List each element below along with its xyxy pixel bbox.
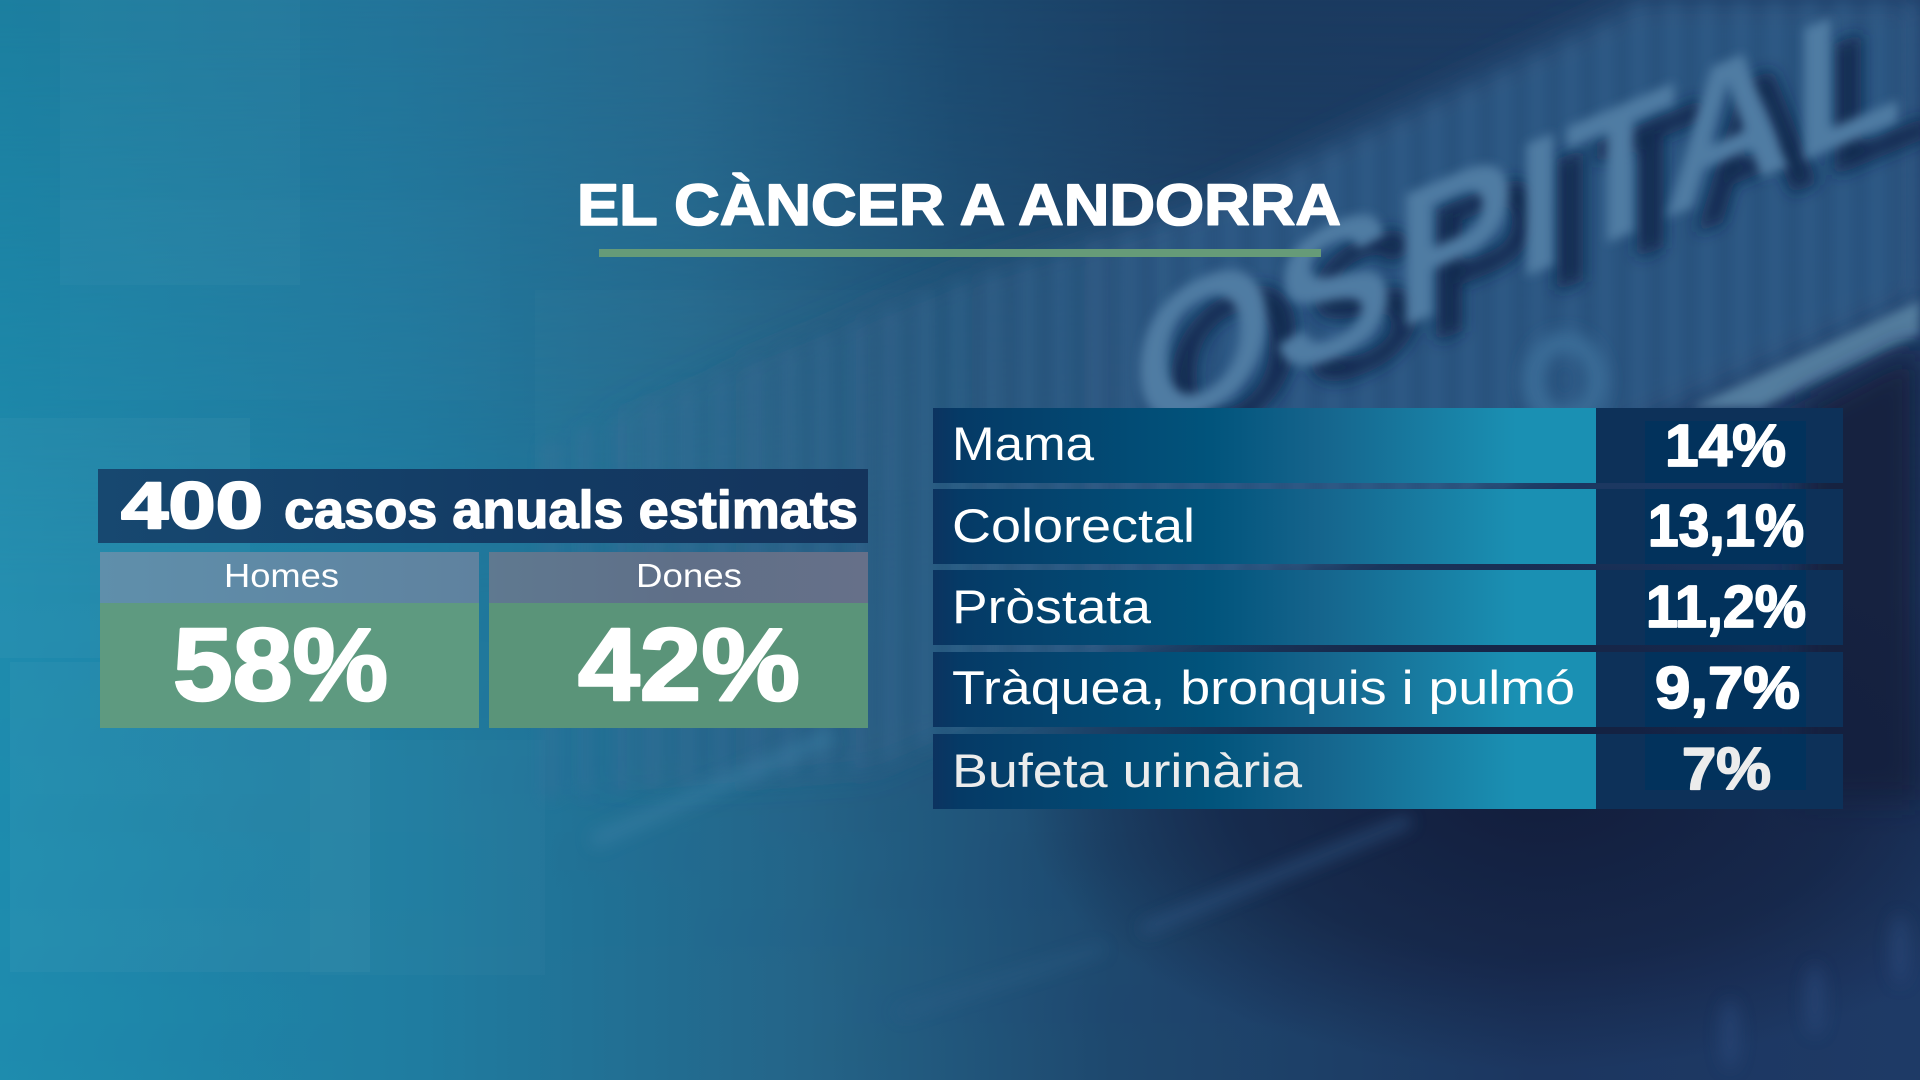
headline number: 400 bbox=[121, 468, 263, 542]
row: Colorectal: 13,1% bbox=[1648, 493, 1804, 559]
row: Bufeta urinària: 7% bbox=[1682, 736, 1771, 802]
label: women: Dones bbox=[636, 557, 742, 594]
row: Mama bbox=[933, 408, 1843, 483]
panel: men share bbox=[100, 552, 479, 728]
row: Pròstata bbox=[933, 570, 1843, 645]
row: Colorectal: Colorectal bbox=[952, 499, 1195, 552]
background: dark vignette and light streaks bbox=[590, 510, 1920, 1070]
value: women: 42% bbox=[578, 607, 800, 722]
row: Pròstata: 11,2% bbox=[1646, 574, 1806, 640]
row: Bufeta urinària: Bufeta urinària bbox=[952, 744, 1303, 797]
background: teal to navy gradient bbox=[0, 0, 1294, 1080]
panel: women share bbox=[489, 552, 868, 728]
row: Tràquea, bronquis i pulmó: Tràquea, bronquis i pulmó bbox=[952, 661, 1575, 714]
row: Tràquea, bronquis i pulmó bbox=[933, 652, 1843, 727]
row: Mama: Mama bbox=[952, 417, 1095, 470]
background: blurred hospital facade lettering bbox=[530, 0, 1920, 800]
row: Mama: 14% bbox=[1665, 413, 1786, 479]
panel: cancer types table bbox=[933, 408, 1843, 809]
title: EL CÀNCER A ANDORRA bbox=[577, 173, 1341, 238]
row: Pròstata: Pròstata bbox=[952, 580, 1152, 633]
panel: annual cases bbox=[98, 468, 868, 543]
value: men: 58% bbox=[173, 607, 388, 722]
row: Tràquea, bronquis i pulmó: 9,7% bbox=[1655, 655, 1800, 721]
row: Colorectal bbox=[933, 489, 1843, 564]
label: men: Homes bbox=[224, 557, 339, 594]
headline label: casos anuals estimats bbox=[284, 481, 858, 540]
row: Bufeta urinària bbox=[933, 734, 1843, 809]
